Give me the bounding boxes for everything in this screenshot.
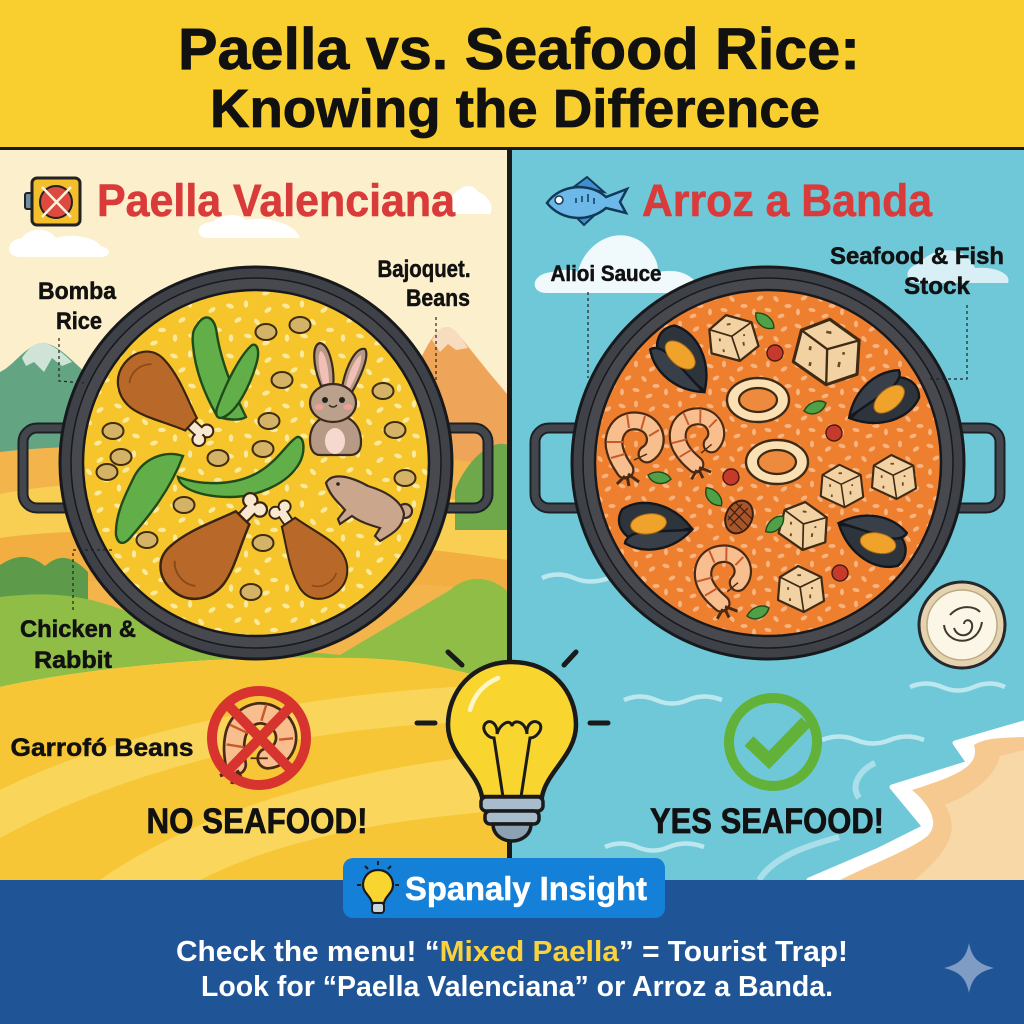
label: Chicken & Rabbit: Rabbit [34, 647, 112, 674]
mussels [617, 319, 925, 570]
label: Bomba Rice: Bomba [38, 278, 117, 305]
icon: sparkle [944, 943, 994, 993]
label: Seafood & Fish Stock: Stock [904, 273, 971, 300]
icon: fish [547, 177, 627, 225]
label: Garrofó Beans: Garrofó Beans [10, 734, 194, 762]
title: Knowing the Difference [210, 79, 820, 139]
title: Paella vs. Seafood Rice: [178, 17, 860, 82]
section heading: Paella Valenciana: Paella Valenciana [97, 175, 456, 226]
garnish [647, 308, 848, 619]
insight text: Check the menu! “ Mixed Paella” = Tourist Trap! [176, 936, 848, 968]
label: Alioi Sauce: Alioi Sauce [550, 261, 662, 286]
footer panel [0, 858, 1024, 1024]
fish chunks [705, 310, 916, 612]
title [178, 17, 860, 139]
icon: small bulb [357, 861, 399, 913]
header banner [0, 0, 1024, 150]
icon: central light bulb [417, 652, 608, 841]
label: Bajoquet. Beans [378, 256, 470, 385]
badge: Spanaly Insight: Spanaly Insight [405, 870, 647, 907]
panel: Arroz a Banda background [512, 150, 1024, 880]
label: Bomba Rice: Rice [56, 308, 102, 335]
insight text [176, 936, 848, 1003]
rabbit meat [326, 476, 412, 541]
pan handles [535, 428, 1000, 508]
label: Seafood & Fish Stock [830, 243, 1004, 379]
badge: Spanaly Insight [343, 858, 665, 918]
section heading: Arroz a Banda: Arroz a Banda [642, 175, 933, 226]
rabbit [310, 343, 366, 455]
right arroz a banda pan [535, 267, 1000, 659]
label: Bajoquet. Beans: Beans [406, 285, 470, 312]
label: Chicken & Rabbit [20, 550, 136, 674]
beans [96, 317, 416, 600]
squid rings [727, 378, 808, 484]
label: Chicken & Rabbit: Chicken & [20, 616, 136, 643]
label: Bomba Rice [38, 278, 117, 383]
icon: yes seafood check [729, 698, 817, 786]
label: Seafood & Fish Stock: Seafood & Fish [830, 243, 1004, 270]
panel: Paella Valenciana background [0, 150, 508, 880]
label: Bajoquet. Beans: Bajoquet. [378, 256, 470, 283]
beach [809, 723, 1024, 880]
pan handles [23, 428, 488, 508]
icon: no seafood sign [208, 691, 306, 799]
chicken legs [105, 341, 359, 613]
caption: yes seafood: YES SEAFOOD! [650, 802, 884, 841]
icon: paella burner [25, 178, 80, 225]
divider line [507, 150, 512, 880]
caption: no seafood: NO SEAFOOD! [146, 802, 368, 841]
left paella pan [23, 267, 488, 659]
alioli bowl [919, 582, 1005, 668]
label: Alioi Sauce [550, 261, 662, 378]
insight text: Look for “Paella Valenciana” or Arroz a Banda. [201, 971, 833, 1003]
shrimp [607, 405, 757, 623]
green beans [116, 317, 303, 543]
